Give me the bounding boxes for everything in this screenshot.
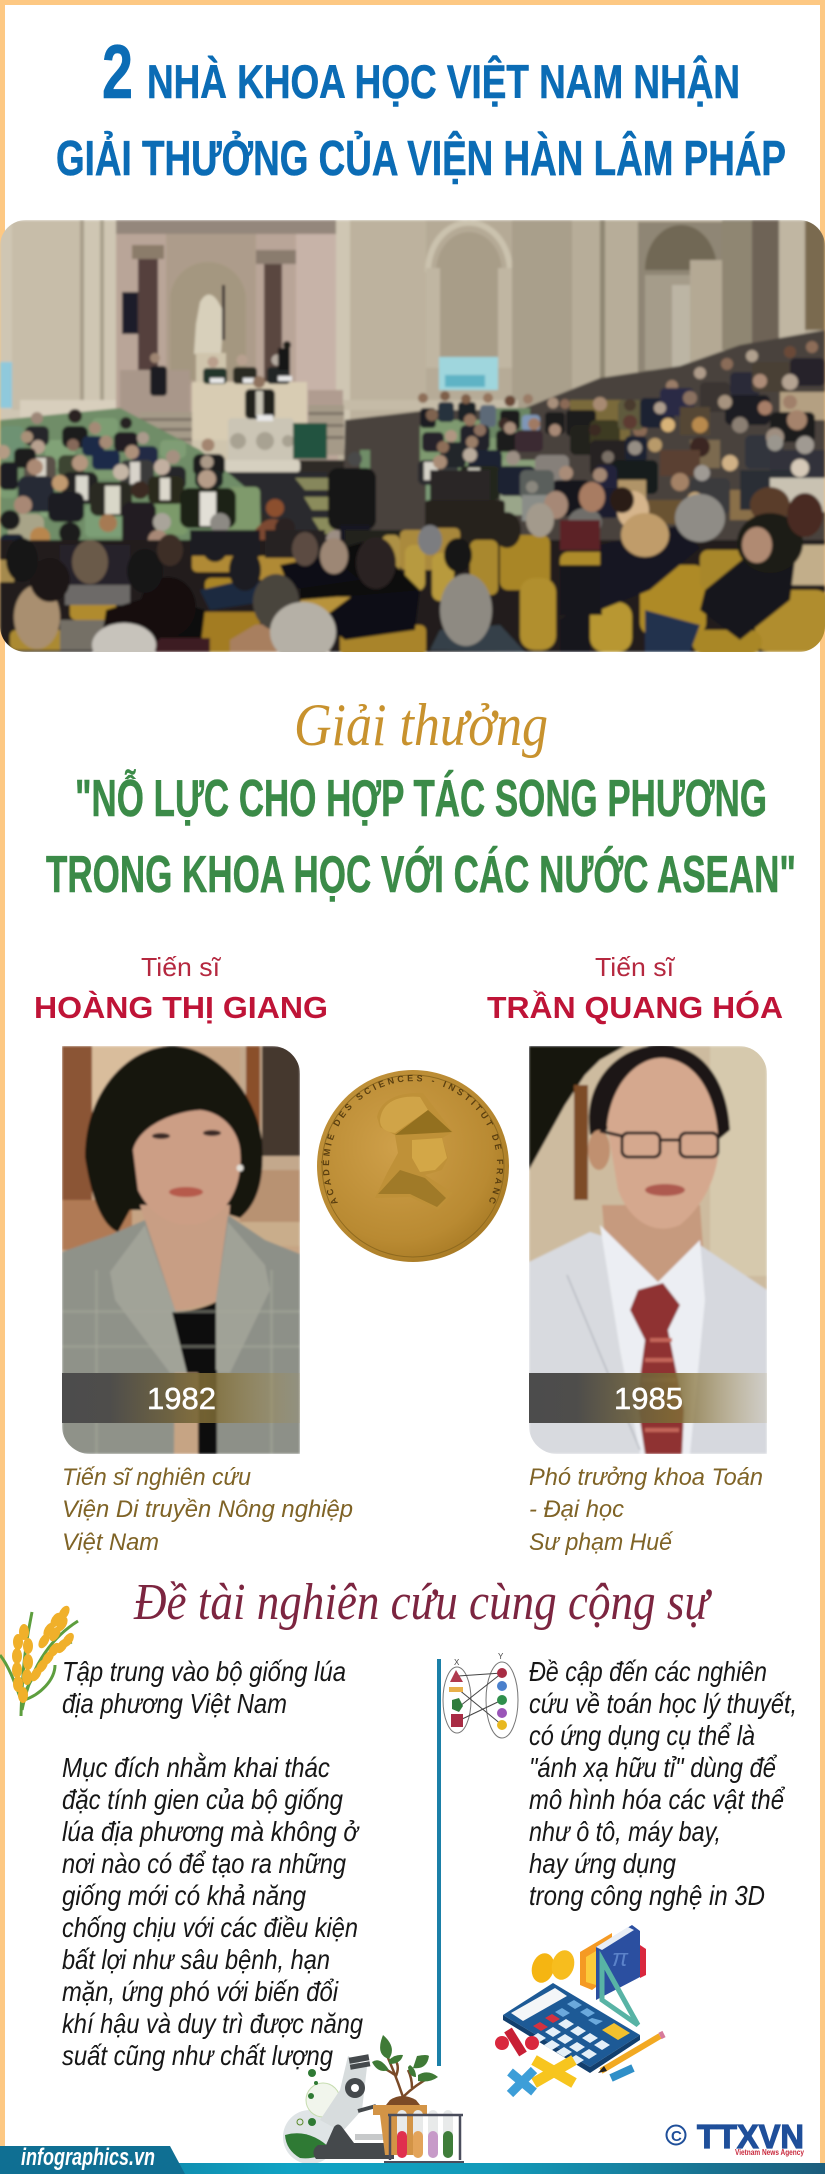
left research text: mặn, ứng phó với biến đổi <box>62 1976 339 2007</box>
portrait: Trần Quang Hóa <box>529 1045 767 1454</box>
icon: rice <box>0 1604 78 1716</box>
left research text: bất lợi như sâu bệnh, hạn <box>62 1944 330 1975</box>
academicians seated left <box>0 408 342 542</box>
title: 2 <box>102 30 133 115</box>
jury at desk and speaker <box>150 341 292 421</box>
description left: Việt Nam <box>62 1529 159 1556</box>
year band left: 1982 <box>147 1381 216 1416</box>
scientist name right: TRẦN QUANG HÓA <box>487 989 783 1025</box>
medal bust <box>375 1093 453 1210</box>
icon: lab equipment and plant <box>283 2035 464 2165</box>
description right: Phó trưởng khoa Toán <box>529 1464 763 1491</box>
right research text: hay ứng dụng <box>529 1848 676 1879</box>
hall walls and architecture <box>0 220 825 460</box>
scientist name left: HOÀNG THỊ GIANG <box>34 990 328 1025</box>
right research text: "ánh xạ hữu tỉ" dùng để <box>529 1752 777 1783</box>
icon: calculator and math tools: π <box>612 1945 629 1972</box>
left research text: nơi nào có để tạo ra những <box>62 1848 346 1879</box>
audience and gold seats lower rows <box>0 470 825 667</box>
scientist name left: Tiến sĩ <box>141 952 222 982</box>
tie <box>630 1283 684 1454</box>
glasses <box>600 1131 718 1157</box>
suit <box>529 1231 640 1454</box>
gold medal <box>317 1070 509 1262</box>
icon: set mapping diagram <box>443 1652 518 1738</box>
face <box>131 1108 243 1206</box>
neck <box>138 1202 232 1216</box>
icon: set mapping diagram: Y <box>498 1652 504 1661</box>
TTXVN logo: Vietnam News Agency <box>735 2148 804 2157</box>
large heads foreground <box>6 482 823 667</box>
description left: Tiến sĩ nghiên cứu <box>62 1464 251 1491</box>
year band right <box>529 1373 767 1423</box>
scientist name right <box>487 952 783 1025</box>
left research text: suất cũng như chất lượng <box>62 2040 333 2071</box>
left research text: giống mới có khả năng <box>62 1880 306 1911</box>
hair <box>85 1046 263 1232</box>
audience heads right upper rows <box>418 341 825 524</box>
gold medal: ACADÉMIE DES SCIENCES - INSTITUT DE FRANCE <box>321 1074 504 1204</box>
face <box>607 1058 719 1229</box>
award name heading <box>46 769 796 904</box>
icon: calculator and math tools <box>495 1925 664 2094</box>
description right: Sư phạm Huế <box>529 1529 674 1556</box>
research heading: Đề tài nghiên cứu cùng cộng sự <box>133 1574 712 1631</box>
right research text: trong công nghệ in 3D <box>529 1880 765 1911</box>
audience mass right <box>342 328 825 542</box>
black top <box>171 1301 218 1373</box>
jacket <box>62 1220 175 1454</box>
left research text: khí hậu và duy trì được năng <box>62 2008 363 2039</box>
scientist name right: Tiến sĩ <box>595 952 676 982</box>
scientist name left <box>34 952 328 1025</box>
statue <box>194 294 224 354</box>
right research text: có ứng dụng cụ thể là <box>529 1720 755 1751</box>
hair <box>589 1045 730 1140</box>
left research text: Mục đích nhằm khai thác <box>62 1752 330 1783</box>
left research text <box>62 1656 363 2071</box>
right research text: như ô tô, máy bay, <box>529 1816 721 1847</box>
year band left <box>62 1373 300 1423</box>
photo: award ceremony hall <box>0 220 825 667</box>
left research text: địa phương Việt Nam <box>62 1688 287 1719</box>
description right <box>529 1464 763 1556</box>
year band right: 1985 <box>614 1381 683 1416</box>
left research text: chống chịu với các điều kiện <box>62 1912 358 1943</box>
title <box>56 30 786 186</box>
right research text: Đề cập đến các nghiên <box>529 1656 767 1687</box>
green seats audience left <box>0 407 263 542</box>
award label script heading: Giải thưởng <box>294 692 548 758</box>
footer bar: infographics.vn <box>21 2144 155 2171</box>
description right: - Đại học <box>529 1496 624 1523</box>
TTXVN logo: C <box>671 2128 682 2145</box>
left research text: Tập trung vào bộ giống lúa <box>62 1656 346 1687</box>
portrait: Hoàng Thị Giang <box>62 1046 300 1454</box>
icon: set mapping diagram: X <box>454 1658 460 1667</box>
description left <box>62 1464 353 1556</box>
description left: Viện Di truyền Nông nghiệp <box>62 1496 353 1523</box>
right research text <box>529 1656 797 1911</box>
TTXVN logo: TTXVN <box>697 2118 804 2155</box>
footer bar <box>0 2144 825 2174</box>
neck <box>602 1204 704 1282</box>
screens <box>0 357 498 408</box>
photographer standing <box>328 452 376 555</box>
left research text: lúa địa phương mà không ở <box>62 1816 360 1847</box>
left research text: đặc tính gien của bộ giống <box>62 1784 343 1815</box>
stage: steps, desk, podium <box>120 370 345 540</box>
right research text: mô hình hóa các vật thể <box>529 1784 785 1815</box>
